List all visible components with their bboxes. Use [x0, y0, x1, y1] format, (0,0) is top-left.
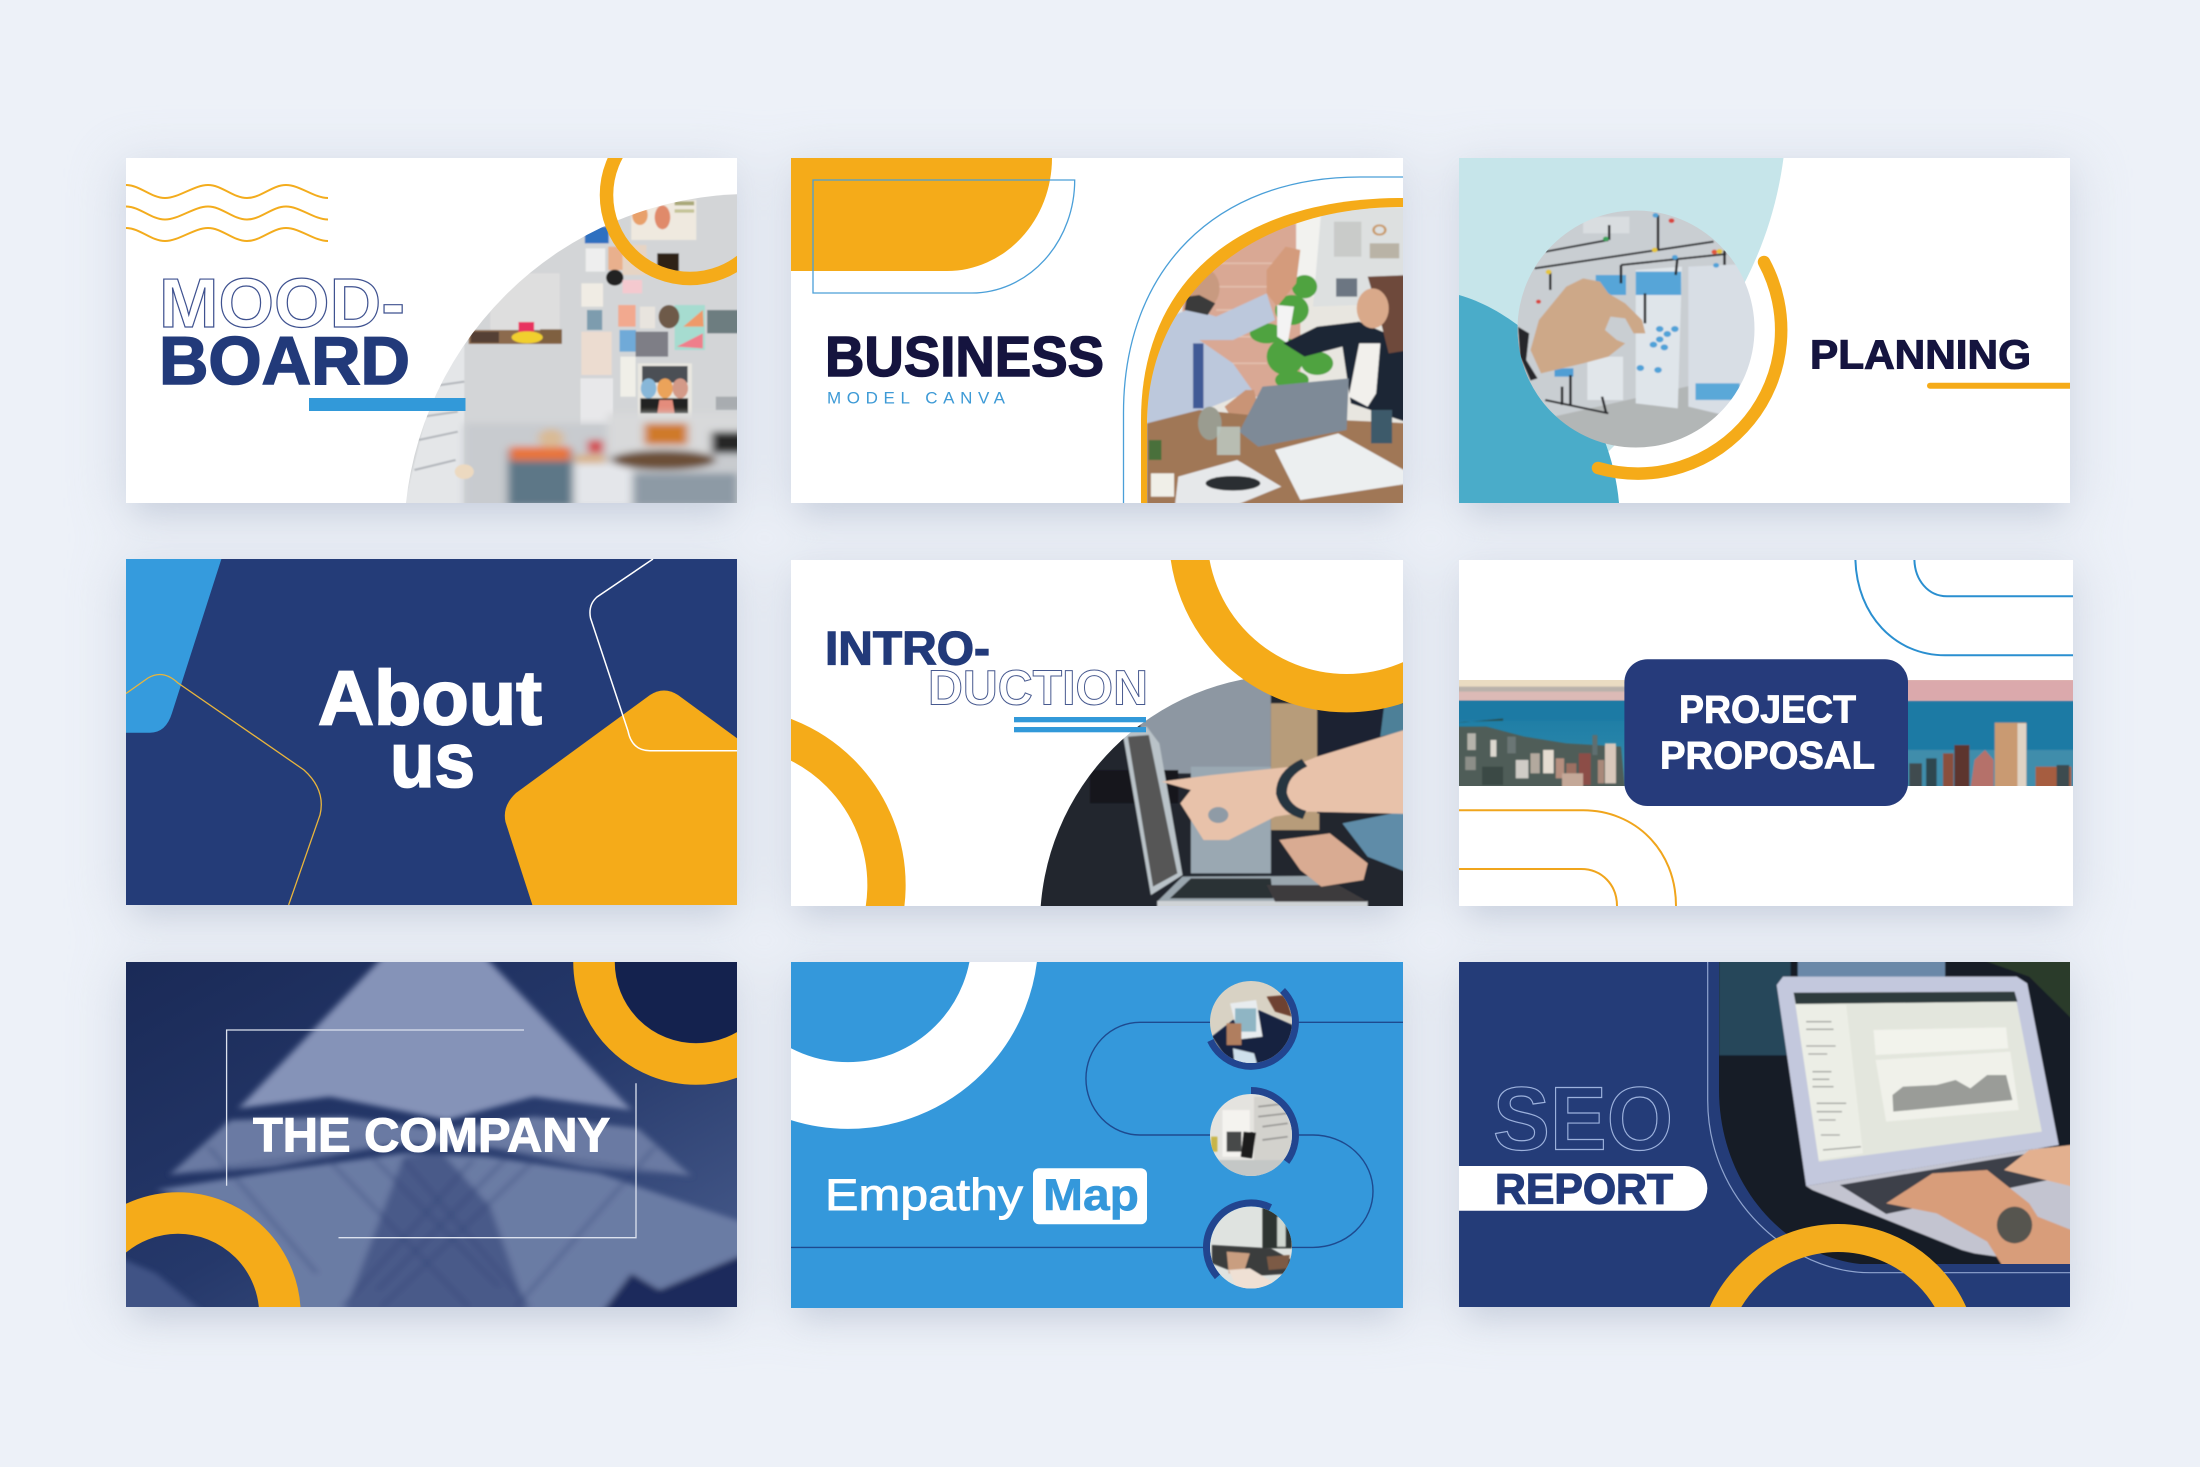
photo: laptop with analytics dashboard — [1709, 957, 2080, 1270]
decoration: three yellow waves — [126, 185, 328, 241]
heading: PROJECT: PROJECT — [1679, 689, 1856, 732]
heading: MOOD- outlined: MOOD- — [159, 264, 405, 342]
panel: About us slide — [126, 559, 737, 905]
heading: THE COMPANY: THE COMPANY — [253, 1109, 610, 1163]
photo: coastal city skyline strip — [1453, 677, 2080, 790]
decoration: blue outlined block — [813, 180, 1075, 293]
photo: hand pinning a planning board — [1512, 205, 1764, 453]
panel: Empathy Map slide — [691, 782, 1403, 1308]
heading: SEO outlined: SEO — [1493, 1069, 1673, 1169]
decoration: yellow pentagon line — [126, 674, 321, 905]
photo: colleagues high five — [1147, 207, 1403, 503]
decoration: blue lines — [1855, 560, 2073, 655]
photo: hands pointing at laptop — [1035, 670, 1414, 920]
panel: Introduction slide — [570, 376, 1505, 1044]
heading: BUSINESS: BUSINESS — [825, 325, 1104, 388]
photo: studio wall with pinned art — [406, 194, 737, 503]
heading: REPORT: REPORT — [1495, 1165, 1673, 1213]
title plate — [1624, 659, 1908, 806]
decoration: white ring — [691, 782, 1005, 1096]
heading: BOARD: BOARD — [159, 323, 410, 399]
decoration: curved line — [1708, 962, 2070, 1273]
decoration: light blue shape — [126, 559, 221, 733]
frame lines — [227, 1030, 636, 1238]
panel: Mood-board slide — [126, 158, 737, 503]
decoration: orange rounded block — [791, 158, 1052, 271]
heading: PROPOSAL: PROPOSAL — [1660, 735, 1875, 778]
decoration: top right ring — [594, 860, 798, 1064]
panel: Project Proposal slide — [1453, 560, 2080, 906]
decoration: orange ring — [600, 158, 737, 286]
decoration: orange arch — [1141, 198, 1403, 503]
decoration: dark teal shape — [1459, 295, 1619, 503]
heading: INTRO-: INTRO- — [825, 622, 990, 675]
label pill: Map — [1033, 1168, 1147, 1224]
icon: photo circle one — [1210, 981, 1296, 1068]
icon: photo circle two — [1210, 1090, 1295, 1177]
white label pill — [1459, 1166, 1707, 1211]
decoration: light teal shape — [1459, 158, 1784, 460]
decoration: orange ring — [1712, 1238, 1964, 1467]
infographic: gallery of nine presentation slides — [108, 152, 2092, 1336]
decoration: orange arc — [1598, 262, 1781, 474]
decoration: bottom left ring — [76, 1213, 280, 1417]
decoration: top right orange ring — [1188, 376, 1505, 693]
decoration: bottom left orange ring — [570, 726, 886, 1044]
heading: Empathy: Empathy — [825, 1171, 1024, 1220]
photo: tinted glass building — [117, 953, 746, 1317]
decoration: blue arch line — [1124, 177, 1403, 503]
accent line — [1930, 383, 2075, 389]
accent bar — [309, 398, 466, 411]
decoration: orange pentagon — [505, 690, 737, 905]
icon: photo circle three — [1206, 1203, 1292, 1290]
panel: The Company slide — [76, 860, 798, 1417]
decoration: white pentagon line — [590, 559, 737, 751]
heading: DUCTION outlined: DUCTION — [928, 661, 1148, 715]
connector path — [791, 1022, 1403, 1247]
panel: Business Model Canva slide — [791, 158, 1414, 513]
decoration: orange lines — [1459, 810, 1676, 906]
heading: About: About — [318, 656, 542, 741]
heading: PLANNING: PLANNING — [1810, 331, 2031, 377]
label pill: Map: Map — [1043, 1171, 1139, 1220]
panel: Planning slide — [1459, 158, 2075, 503]
subheading: MODEL CANVA: MODEL CANVA — [827, 388, 1006, 407]
accent bars — [1014, 717, 1146, 732]
panel: SEO Report slide — [1459, 957, 2080, 1467]
heading: us: us — [390, 716, 475, 804]
